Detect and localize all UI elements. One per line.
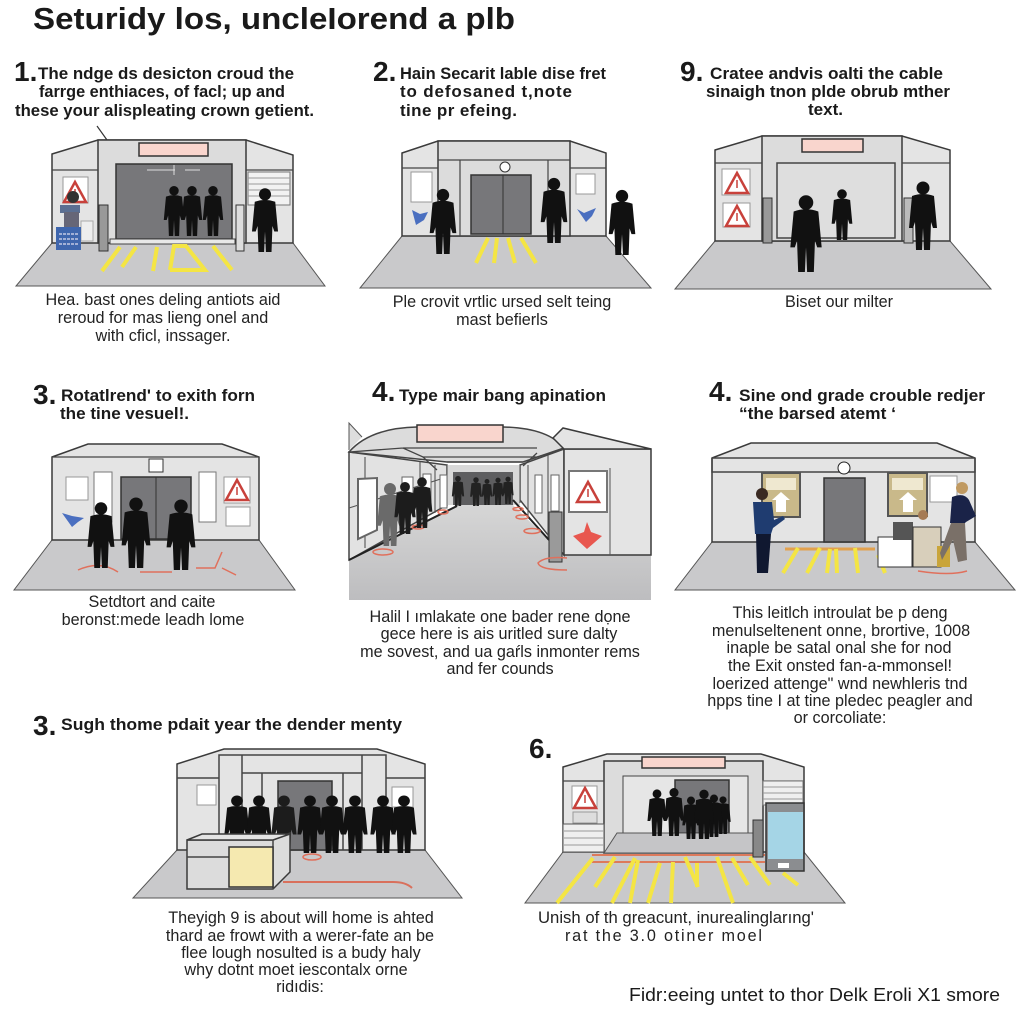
bottom step 3 caption: why dotnt moet iescontalx orne [183,961,408,979]
step 9 heading [680,56,950,119]
step 4 heading: 4. [372,376,395,407]
step 2 heading [373,56,606,120]
panel: step 4 corridor [349,376,651,678]
step 4 caption: me sovest, and ua gaŕls inmonter rems [360,643,640,661]
step 3 heading: Rotatlrend' to exith forn [61,386,255,405]
bottom step 3 caption: Theyigh 9 is about will home is ahted [168,909,434,927]
step 4 caption: Halil I ımlakate one bader rene dọne [370,608,630,626]
step 1 heading: 1. [14,56,37,87]
woman in navy [940,482,976,562]
step 4 heading [372,376,606,407]
man in blue [753,488,785,573]
step 4b caption: hpps tine I at tine pledec peagler and [707,692,973,710]
step 1 illustration [16,126,325,286]
step 4b heading [709,376,985,423]
step 4 caption: and fer counds [446,660,554,678]
step 9 heading: sinaigh tnon plde obrub mther [706,82,950,101]
step 4 caption: gece here is ais uritled sure dalty [381,625,618,643]
step 4 illustration [349,423,651,600]
bottom step 3 heading: 3. [33,710,56,741]
step 2 caption [393,293,611,329]
panel: step 3 middle left [14,379,295,629]
step 1 heading: The ndge ds desicton croud the [38,64,294,83]
step 2 illustration [360,141,651,288]
step 3 illustration [14,444,295,590]
panel: step 4 right [675,376,1015,727]
bottom step 3 caption [166,909,434,996]
panel: step 6 [525,733,845,945]
step 9 heading: 9. [680,56,703,87]
step 3 heading: 3. [33,379,56,410]
step 4b heading: 4. [709,376,732,407]
step 4b caption: the Exit onsted fan-a-mmonsel! [728,657,952,675]
step 2 heading: to defosaned t,note [400,82,572,101]
step 2 heading: tine pr efeing. [400,101,517,120]
step 4b heading: Sine ond grade crouble redjer [739,386,985,405]
title: Seturidy los, uncleIorend a plb [33,1,515,36]
step 3 caption [62,593,244,629]
step 9 heading: text. [808,100,843,119]
step 4b caption [707,604,973,727]
bottom step 3 heading: Sugh thome pdait year the dender menty [61,715,403,734]
step 4 caption [360,608,640,678]
step 3 caption: Setdtort and caite [89,593,215,611]
bottom step 3 caption: ridıdis: [276,978,324,996]
step 4b caption: This leitlch introulat be p deng [732,604,948,622]
step 1 heading [14,56,314,120]
bottom step 3 caption: flee lough nosulted is a budy haly [181,944,422,962]
step 6 caption [538,909,814,945]
bottom step 3 heading [33,710,403,741]
step 9 heading: Cratee andvis oalti the cable [710,64,943,83]
bottom step 3 illustration [133,749,462,898]
step 9 caption: Biset our milter [785,293,894,311]
step 1 caption [46,291,280,345]
panel: step 3 bottom [33,710,462,996]
step 1 caption: with cficl, inssager. [95,327,230,345]
step 3 heading: the tine vesuel!. [60,404,189,423]
panel: step 2 [360,56,651,329]
step 2 caption: Ple crovit vrtlic ursed selt teing [393,293,611,311]
step 1 caption: Hea. bast ones deling antiots aid [46,291,280,309]
step 9 illustration [675,136,991,289]
step 2 caption: mast befierls [456,311,548,329]
step 4 heading: Type mair bang apination [399,386,606,405]
step 4b illustration [675,443,1015,590]
step 4b caption: menulseltenent onne, brortive, 1008 [712,622,970,640]
step 1 caption: reroud for mas lieng onel and [58,309,268,327]
bottom step 3 caption: thard ae frowt with a werer-fate an be [166,927,434,945]
panel: step 1 [14,56,325,345]
step 2 heading: Hain Secarit lable dise fret [400,64,606,83]
step 4b caption: or corcoliate: [794,709,886,727]
step 4b heading: “the barsed atemt ‘ [739,404,896,423]
step 1 heading: farrge enthiaces, of facl; up and [39,82,285,101]
step 6 caption: rat the 3.0 otiner moel [565,927,762,945]
step 3 caption: beronst:mede leadh lome [62,611,244,629]
step 6 heading: 6. [529,733,552,764]
step 6 caption: Unish of th greacunt, inurealinglarıng' [538,909,814,927]
panel: step 9 [675,56,991,311]
step 4b caption: inaple be satal onal she for nod [726,639,952,657]
step 2 heading: 2. [373,56,396,87]
counter box [187,833,290,889]
footer note: Fidr:eeing untet to thor Delk Eroli X1 smore [629,984,1000,1005]
step 3 heading [33,379,255,423]
step 4b caption: loerized attenge" wnd newhleris tnd [712,675,968,693]
step 1 heading: these your alispleating crown getient. [15,101,314,120]
step 6 illustration [525,754,845,903]
